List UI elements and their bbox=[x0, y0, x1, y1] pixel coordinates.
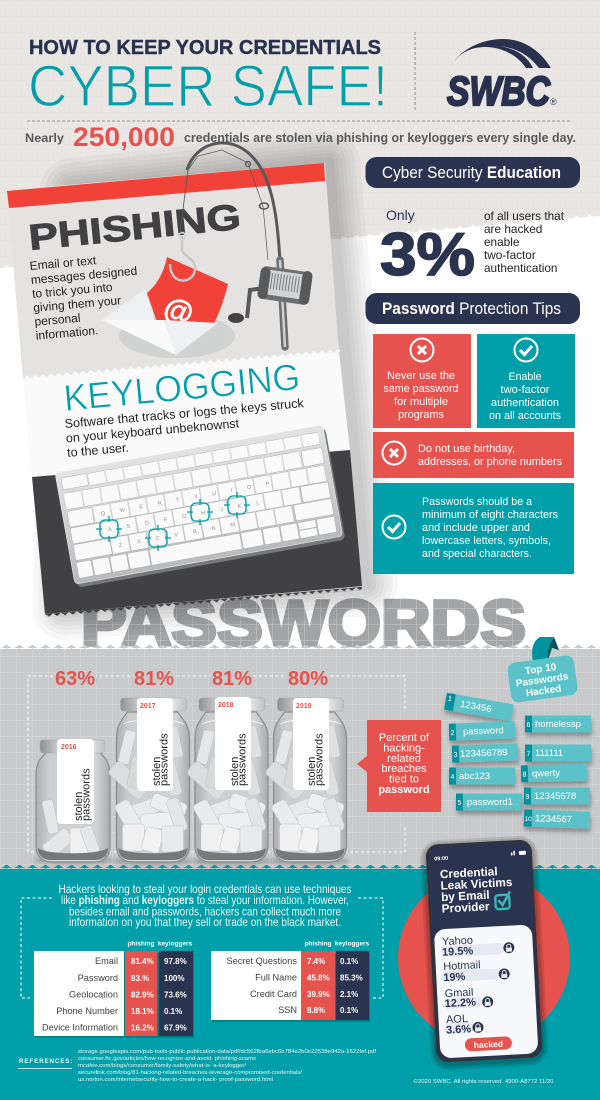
icon: cross bbox=[410, 338, 434, 362]
references bbox=[18, 1049, 377, 1083]
text: hackers intro paragraph: information on you that they sell or trade on the black market. bbox=[69, 916, 341, 929]
paper: keylogging background bbox=[23, 349, 350, 478]
list: top 10 passwords: 123456789 bbox=[460, 747, 508, 760]
status icons bbox=[511, 850, 526, 855]
jar: 2019: 2019 bbox=[296, 703, 312, 710]
heading: PASSWORDS: PASSWORDS bbox=[81, 587, 526, 659]
provider values: 19% bbox=[443, 971, 466, 984]
stat: Only 3%: are hacked bbox=[484, 222, 542, 236]
keyboard illustration bbox=[55, 424, 345, 588]
red circle behind phone bbox=[398, 872, 570, 1044]
list: top 10 passwords: homelessp bbox=[535, 719, 581, 730]
jar: 2018 bbox=[186, 697, 271, 865]
tip: password length: and include upper and bbox=[422, 522, 530, 534]
tip: avoid personal data bbox=[373, 432, 574, 478]
icon: check bbox=[514, 338, 538, 362]
tip: password length: minimum of eight characters bbox=[422, 509, 558, 521]
jar: 2016 bbox=[33, 739, 113, 864]
jar: 2016: stolen bbox=[73, 792, 85, 821]
list: top 10 passwords: 7 bbox=[526, 751, 530, 758]
background: white middle section bbox=[0, 211, 600, 660]
provider values: 3.6% bbox=[446, 1023, 472, 1037]
logo: SWBC bbox=[447, 39, 557, 114]
list: top 10 passwords: 8 bbox=[522, 772, 527, 779]
heading: KEYLOGGING: KEYLOGGING bbox=[62, 356, 302, 419]
table: credentials data left: 16.2% bbox=[131, 1024, 154, 1032]
table: credentials data right: 2.1% bbox=[340, 990, 358, 999]
table: credentials data right: Credit Card bbox=[250, 989, 297, 999]
stat: Only 3%: Only bbox=[386, 207, 415, 223]
key rows bbox=[61, 432, 337, 578]
stat: Only 3%: of all users that bbox=[484, 209, 565, 223]
stat: Only 3%: authentication bbox=[484, 261, 557, 275]
paper shadow bbox=[65, 163, 366, 608]
text: hackers intro paragraph: besides email and passwords, hackers can collect much more bbox=[69, 906, 341, 918]
callout: percent of breaches: Percent of bbox=[379, 732, 430, 744]
list: top 10 passwords: abc123 bbox=[459, 771, 490, 782]
phone title: Credential bbox=[440, 864, 498, 881]
table: credentials data left: keyloggers bbox=[158, 940, 193, 948]
table: credentials data left: 82.9% bbox=[131, 990, 154, 1000]
jar: 2018: passwords bbox=[236, 733, 248, 786]
list: top 10 passwords: 4 bbox=[450, 774, 454, 781]
phone title: by Email bbox=[441, 888, 490, 904]
provider values: 19.5% bbox=[442, 945, 474, 959]
icon: phishing envelope on hook bbox=[102, 232, 235, 358]
table: credentials data right: 0.1% bbox=[340, 1006, 358, 1015]
logo: SWBC: SWBC bbox=[447, 68, 551, 114]
key labels: ZXCVBNM bbox=[118, 519, 251, 549]
title: CYBER SAFE! bbox=[28, 54, 388, 119]
list: top 10 passwords: 6 bbox=[526, 722, 530, 729]
table: credentials data right: keyloggers bbox=[335, 940, 370, 948]
phone: credential leak victims bbox=[424, 839, 543, 1065]
heading: PHISHING: PHISHING bbox=[27, 196, 243, 258]
list: top 10 passwords: 123456 bbox=[459, 699, 492, 715]
icon: phishing envelope on hook: @ bbox=[160, 292, 197, 331]
pill: Cyber Security Education bbox=[366, 157, 580, 188]
references: mcafee.com/blogs/consumer/family-safety/what-is- a-keylogger/ bbox=[78, 1063, 247, 1069]
percentages bbox=[55, 668, 328, 690]
keyboard highlights: tracked keys bbox=[96, 492, 250, 551]
provider values: 12.2% bbox=[444, 996, 476, 1010]
provider values: Hotmail bbox=[443, 959, 481, 973]
panel: phishing and keylogging paper bbox=[7, 163, 362, 617]
table: credentials data left: 100% bbox=[164, 974, 184, 983]
callout: percent of breaches bbox=[357, 720, 441, 812]
table: credentials data left: 97.8% bbox=[164, 957, 187, 966]
text: keylogging description: Software that tracks or logs the keys struck bbox=[64, 396, 305, 431]
key labels bbox=[101, 479, 291, 551]
stat line: 250,000 credentials: Nearly bbox=[25, 131, 64, 145]
list: top 10 passwords: password1 bbox=[467, 797, 513, 808]
stat: Only 3%: 3% bbox=[380, 221, 475, 288]
list: top 10 passwords: 3 bbox=[453, 752, 458, 759]
table: credentials data right: phishing bbox=[304, 940, 332, 948]
percentages: 80% bbox=[288, 668, 328, 690]
callout: percent of breaches: breaches bbox=[381, 763, 427, 775]
tip: password length bbox=[373, 483, 574, 574]
provider values: Gmail bbox=[444, 987, 474, 1000]
references: REFERENCES: bbox=[19, 1058, 73, 1065]
tip: enable two-factor: authentication bbox=[491, 397, 559, 409]
tip: enable two-factor bbox=[477, 334, 575, 428]
table: credentials data left: 0.1% bbox=[164, 1007, 182, 1016]
jar: 2017 bbox=[107, 698, 192, 865]
tip: password length: lowercase letters, symbols, bbox=[422, 535, 551, 547]
table: credentials data left: Device Information bbox=[42, 1022, 118, 1032]
text: phishing description: messages designed bbox=[30, 264, 138, 287]
text: phishing description: Email or text bbox=[29, 253, 97, 273]
jar: 2017: stolen bbox=[151, 757, 163, 786]
background: gray jars section bbox=[0, 645, 600, 874]
text: phishing description: personal bbox=[34, 311, 81, 329]
icon: check bbox=[382, 516, 406, 538]
provider values: AOL bbox=[446, 1013, 468, 1026]
list: top 10 passwords: 1234567 bbox=[535, 813, 572, 826]
list: top 10 passwords: qwerty bbox=[532, 768, 560, 780]
list: top 10 passwords: 12345678 bbox=[534, 791, 576, 802]
paper: dark keyboard background bbox=[32, 450, 362, 617]
stat: Only 3%: enable bbox=[484, 235, 520, 249]
tip: enable two-factor: on all accounts bbox=[489, 410, 561, 422]
key labels: ASDFGHJKL bbox=[107, 498, 275, 533]
list: top 10 passwords: 2 bbox=[450, 730, 455, 737]
tip: avoid personal data: addresses, or phone numbers bbox=[418, 456, 562, 468]
title: HOW TO KEEP YOUR CREDENTIALS bbox=[29, 37, 381, 59]
tip: password length: and special characters. bbox=[422, 548, 532, 560]
table: credentials data left: 83.% bbox=[131, 974, 149, 983]
jar: 2017: passwords bbox=[158, 733, 170, 786]
references: securelink.com/blog/81-hacking-related-breaches-leverage-compromised-credentials/ bbox=[78, 1070, 303, 1076]
list: top 10 passwords: 9 bbox=[526, 794, 530, 801]
hacked button: hacked bbox=[474, 1039, 503, 1050]
text: hackers intro paragraph: like phishing and keyloggers to steal your information. However, bbox=[61, 894, 349, 907]
jar: 2019 bbox=[264, 698, 350, 865]
tip: password length: Passwords should be a bbox=[422, 496, 533, 508]
text: keylogging description bbox=[64, 396, 308, 460]
logo: SWBC: ® bbox=[550, 97, 557, 107]
table: credentials data left: Email bbox=[95, 956, 118, 966]
copyright: ©2020 SWBC. All rights reserved. 4900-A8772 11/20 bbox=[414, 1078, 554, 1085]
table: credentials data right: Full Name bbox=[255, 972, 297, 982]
tag: Top 10 Passwords Hacked: Passwords bbox=[515, 671, 570, 690]
tag: Top 10 Passwords Hacked bbox=[507, 637, 578, 703]
list: top 10 passwords: 10 bbox=[524, 816, 532, 823]
dashed frame around jars bbox=[28, 676, 405, 852]
background: beige header bbox=[0, 0, 600, 275]
table: credentials data right: 45.8% bbox=[307, 974, 330, 982]
stat: Only 3%: two-factor bbox=[484, 248, 536, 262]
paper: phishing background bbox=[7, 163, 339, 380]
jar: 2017: 2017 bbox=[140, 703, 156, 710]
icons: locks bbox=[468, 942, 519, 1033]
white provider panel bbox=[434, 924, 538, 1058]
list: top 10 passwords: password bbox=[463, 725, 504, 738]
text: phishing description: giving them your bbox=[33, 293, 122, 315]
phone title: Provider bbox=[441, 899, 490, 916]
table: credentials data right: 85.3% bbox=[340, 974, 363, 982]
text: phishing description bbox=[29, 250, 143, 343]
references: us.norton.com/internetsecurity-how-to-create-a-hack- proof-password.html bbox=[78, 1077, 273, 1083]
list: top 10 passwords bbox=[444, 693, 591, 829]
stat line: 250,000 credentials: 250,000 bbox=[73, 122, 175, 152]
table: credentials data left: Phone Number bbox=[56, 1006, 118, 1016]
table: credentials data left: phishing bbox=[127, 940, 155, 948]
icon: cross bbox=[382, 442, 406, 464]
dashed frame around data tables bbox=[21, 898, 383, 998]
jar: 2018: stolen bbox=[229, 757, 241, 786]
jar: 2019: stolen bbox=[306, 757, 318, 786]
hacked button bbox=[465, 1036, 512, 1052]
table: credentials data right bbox=[211, 940, 370, 1022]
provider values: Yahoo bbox=[442, 935, 473, 948]
text: hackers intro paragraph: Hackers looking to steal your login credentials can use techniques bbox=[58, 883, 352, 896]
phone title: Leak Victims bbox=[440, 875, 513, 893]
callout: percent of breaches: password bbox=[378, 784, 430, 796]
red band bbox=[7, 163, 325, 208]
percentages: 81% bbox=[134, 668, 174, 690]
icon: checkbox bbox=[495, 892, 511, 909]
icon: fishing rod and reel bbox=[180, 143, 313, 347]
table: credentials data left: 81.4% bbox=[131, 957, 154, 966]
percentages: 81% bbox=[212, 668, 252, 690]
pill: Cyber Security Education: Cyber Security Education bbox=[382, 164, 561, 182]
callout: percent of breaches: hacking- bbox=[383, 742, 425, 754]
dashed dividers bbox=[27, 32, 571, 121]
table: credentials data left: 67.9% bbox=[164, 1024, 187, 1032]
jar: 2016: passwords bbox=[80, 768, 92, 821]
percentages: 63% bbox=[55, 668, 95, 690]
text: phishing description: to trick you into bbox=[31, 280, 113, 301]
list: top 10 passwords: 5 bbox=[458, 800, 462, 807]
table: credentials data left: 18.1% bbox=[131, 1007, 154, 1016]
tip: avoid personal data: Do not use birthday, bbox=[418, 443, 515, 455]
text: phishing description: information. bbox=[35, 323, 99, 343]
table: credentials data left: 73.6% bbox=[164, 990, 187, 1000]
tip: never reuse passwords: programs bbox=[398, 409, 444, 421]
table: credentials data right: 39.9% bbox=[307, 990, 330, 999]
tip: never reuse passwords: Never use the bbox=[387, 370, 455, 382]
table: credentials data right: 7.4% bbox=[307, 957, 325, 966]
table: credentials data left bbox=[34, 940, 194, 1038]
key labels: QWERTYUIOP bbox=[101, 479, 285, 517]
stat line: 250,000 credentials: credentials are stolen via phishing or keyloggers every single day. bbox=[184, 131, 576, 145]
stat: Only 3% bbox=[380, 207, 565, 288]
tip: never reuse passwords bbox=[373, 334, 471, 428]
text: hackers intro paragraph bbox=[58, 883, 352, 929]
table: credentials data right: 8.8% bbox=[307, 1006, 325, 1015]
pill: Password Protection Tips: Password Protection Tips bbox=[382, 300, 561, 318]
references: storage.googleapis.com/pub-tools-public-publication-data/pdf/dc562fba6ebc6b784e2b0e22538e942a-1622fef.pdf bbox=[78, 1049, 377, 1055]
list: top 10 passwords: 111111 bbox=[535, 748, 563, 759]
tip: never reuse passwords: same password bbox=[384, 383, 458, 395]
phone shadow bbox=[425, 841, 543, 1065]
pill: Password Protection Tips bbox=[366, 293, 580, 324]
tip: enable two-factor: two-factor bbox=[500, 384, 550, 396]
background: teal bottom section bbox=[0, 865, 600, 1100]
table: credentials data right: 0.1% bbox=[340, 957, 358, 966]
text: keylogging description: on your keyboard unbeknownst bbox=[65, 416, 240, 445]
table: credentials data left: Geolocation bbox=[69, 990, 118, 1000]
list: top 10 passwords: 1 bbox=[447, 696, 452, 703]
table: credentials data left: Password bbox=[78, 973, 118, 983]
phone: credential leak victims: 09:00 bbox=[434, 856, 448, 862]
text: keylogging description: to the user. bbox=[67, 441, 129, 460]
tag: Top 10 Passwords Hacked: Top 10 bbox=[524, 662, 557, 677]
table: credentials data right: SSN bbox=[278, 1005, 297, 1015]
callout: percent of breaches: related bbox=[387, 753, 421, 765]
tag: Top 10 Passwords Hacked: Hacked bbox=[525, 683, 562, 699]
stat line: 250,000 credentials bbox=[25, 122, 576, 152]
tip: enable two-factor: Enable bbox=[508, 371, 542, 383]
references: consumer.ftc.gov/articles/how-recognize-and-avoid- phishing-scams bbox=[78, 1056, 257, 1062]
jar: 2019: passwords bbox=[314, 733, 326, 786]
phone title bbox=[440, 863, 514, 916]
tip: never reuse passwords: for multiple bbox=[394, 396, 448, 408]
jar: 2016: 2016 bbox=[61, 744, 77, 751]
table: credentials data right: Secret Questions bbox=[227, 956, 297, 966]
provider values bbox=[441, 934, 484, 1037]
jar: 2018: 2018 bbox=[218, 702, 234, 709]
callout: percent of breaches: tied to bbox=[389, 774, 419, 786]
